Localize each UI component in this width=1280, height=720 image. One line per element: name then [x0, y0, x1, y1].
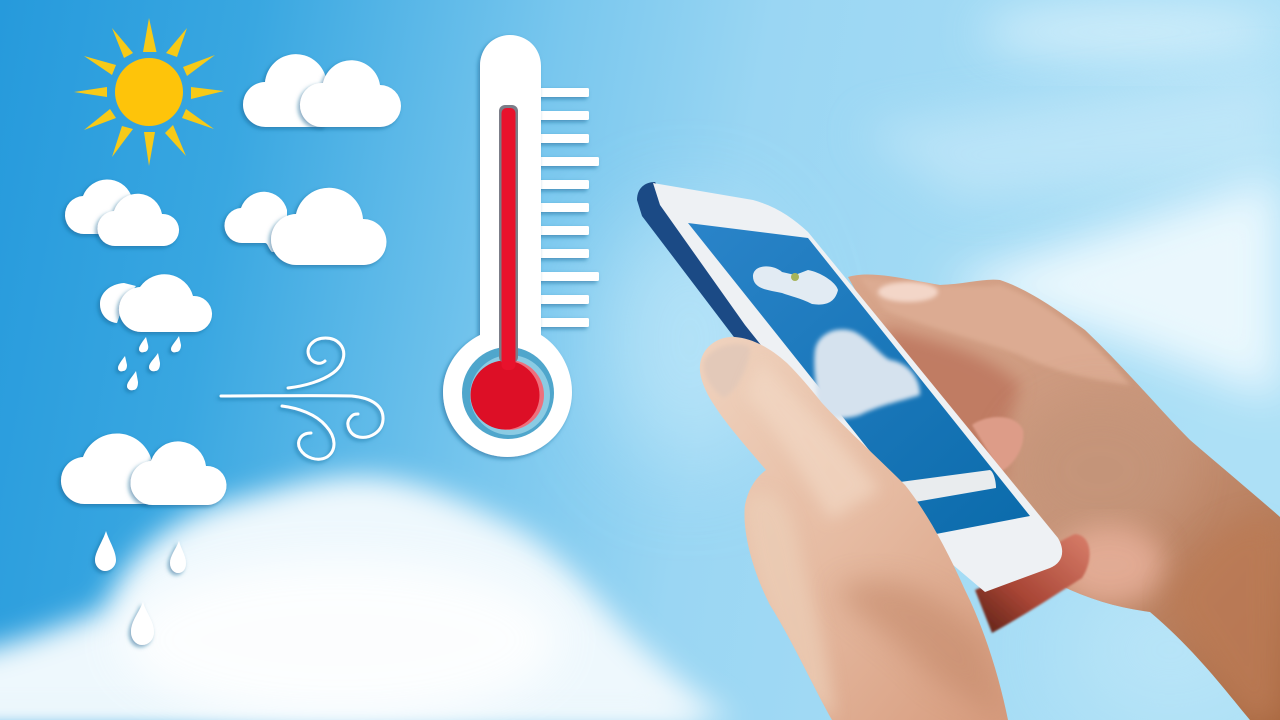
icon: sun [74, 18, 224, 166]
bulb highlight [474, 360, 544, 430]
icon: thermometer [443, 35, 599, 457]
phone face [653, 183, 1062, 592]
thermometer scale ticks [538, 88, 599, 327]
icon: cloud right second row [224, 188, 386, 265]
bulb [470, 360, 540, 430]
sun on screen [791, 273, 799, 281]
icon: cloud left second row [65, 179, 179, 246]
icon: rain cloud [100, 274, 212, 390]
shaded palm under index finger [880, 325, 1020, 480]
mercury column [499, 105, 518, 363]
thumb light [754, 378, 876, 518]
thumb nail [705, 346, 748, 394]
phone and hands [637, 182, 1280, 720]
fingernail [878, 282, 938, 302]
lower finger [975, 534, 1090, 633]
wrist shade [1174, 537, 1278, 720]
icon: wind [221, 338, 383, 459]
back hand with fingers [840, 260, 1280, 720]
icon: two clouds top right [243, 54, 401, 127]
icon: heavy rain cloud [61, 433, 227, 645]
front hand [690, 330, 1020, 720]
foreground soft cloud [0, 476, 735, 720]
palm mid tone [1167, 416, 1175, 424]
palm shading [838, 572, 1002, 701]
screen input bar [900, 470, 996, 502]
index finger light [872, 284, 1128, 384]
finger behind phone [972, 417, 1023, 472]
screen light cloud [814, 329, 920, 418]
left palm edge light [754, 504, 836, 714]
blurred background clouds [600, 2, 1280, 720]
phone blue edge [637, 182, 770, 345]
thermometer body [443, 35, 572, 457]
heel of palm [1055, 525, 1165, 605]
screen small cloud [753, 266, 838, 305]
bulb well [462, 347, 554, 439]
phone screen [688, 223, 1030, 534]
